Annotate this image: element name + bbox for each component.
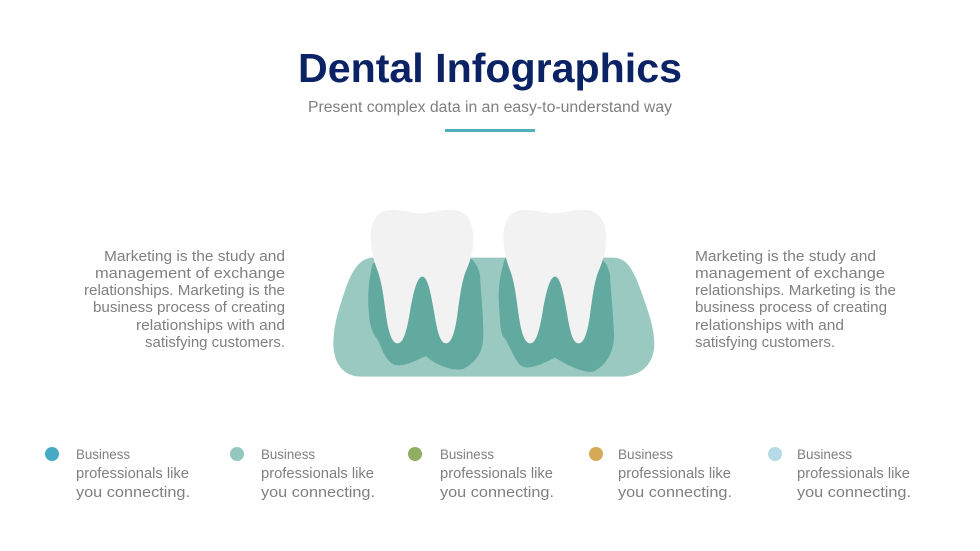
gum bbox=[333, 258, 654, 377]
heading accent bar bbox=[445, 129, 535, 132]
gum shading: left tooth bbox=[368, 258, 483, 370]
legend item 3 bbox=[408, 446, 554, 501]
text block: left description: business process of creating bbox=[93, 299, 285, 316]
icon: left tooth bbox=[371, 210, 473, 343]
legend item 2: you connecting. bbox=[261, 484, 375, 501]
legend item 3: you connecting. bbox=[440, 484, 554, 501]
legend item 1 bbox=[45, 446, 190, 501]
legend item 2: professionals like bbox=[261, 465, 374, 482]
text block: right description: relationships with and bbox=[695, 317, 844, 334]
text block: left description: relationships. Marketing is the bbox=[84, 282, 285, 299]
legend item 1: Business bbox=[76, 446, 130, 462]
text block: right description: management of exchange bbox=[695, 265, 885, 282]
legend item 2 bbox=[230, 446, 375, 501]
icon: right tooth bbox=[503, 210, 606, 343]
text block: right description: business process of creating bbox=[695, 299, 887, 316]
text block: left description bbox=[84, 248, 285, 351]
legend item 4: you connecting. bbox=[618, 484, 732, 501]
legend item 1: professionals like bbox=[76, 465, 189, 482]
legend item 2: Business bbox=[261, 446, 315, 462]
legend item 5: you connecting. bbox=[797, 484, 911, 501]
title: Dental Infographics bbox=[298, 45, 682, 91]
legend item 3: professionals like bbox=[440, 465, 553, 482]
text block: right description: Marketing is the study and bbox=[695, 248, 876, 265]
text block: right description bbox=[695, 248, 896, 351]
text block: right description: satisfying customers. bbox=[695, 334, 835, 351]
legend item 1: you connecting. bbox=[76, 484, 190, 501]
legend item 5: Business bbox=[797, 446, 852, 462]
text block: left description: management of exchange bbox=[95, 265, 285, 282]
legend item 4: professionals like bbox=[618, 465, 731, 482]
legend item 5: professionals like bbox=[797, 465, 910, 482]
text block: left description: Marketing is the study and bbox=[104, 248, 285, 265]
illustration: teeth and gum bbox=[333, 210, 654, 377]
legend item 4 bbox=[589, 446, 732, 501]
legend item 4: Business bbox=[618, 446, 673, 462]
gum shading: right tooth bbox=[499, 258, 614, 372]
legend item 5 bbox=[768, 446, 911, 501]
text block: left description: satisfying customers. bbox=[145, 334, 285, 351]
legend item 3: Business bbox=[440, 446, 494, 462]
text block: right description: relationships. Marketing is the bbox=[695, 282, 896, 299]
text block: left description: relationships with and bbox=[136, 317, 285, 334]
subtitle: Present complex data in an easy-to-understand way bbox=[308, 99, 672, 116]
